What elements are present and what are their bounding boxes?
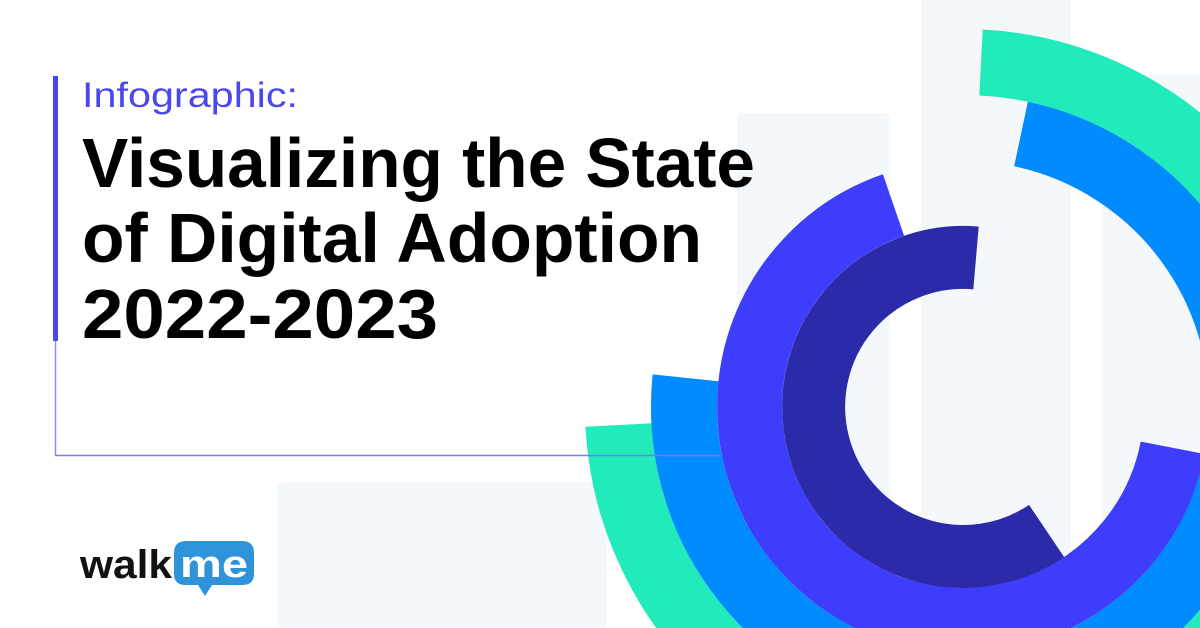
background panels [277, 0, 1200, 628]
arc: dark ring [814, 257, 1047, 556]
title: Visualizing the State [82, 124, 755, 202]
arc: blue ring [684, 134, 1200, 628]
logo: WalkMe [79, 541, 254, 596]
title [82, 124, 755, 353]
subtitle: Infographic: [82, 76, 298, 115]
title: 2022-2023 [82, 275, 438, 353]
frame lines [55, 341, 720, 456]
donut chart [618, 62, 1200, 628]
title: of Digital Adoption [82, 199, 702, 277]
arc: green ring [618, 62, 1200, 628]
accent bar [53, 76, 58, 341]
logo: WalkMe: walk [79, 543, 173, 587]
arc: purple ring [750, 205, 1173, 620]
logo: WalkMe: me [180, 544, 248, 586]
